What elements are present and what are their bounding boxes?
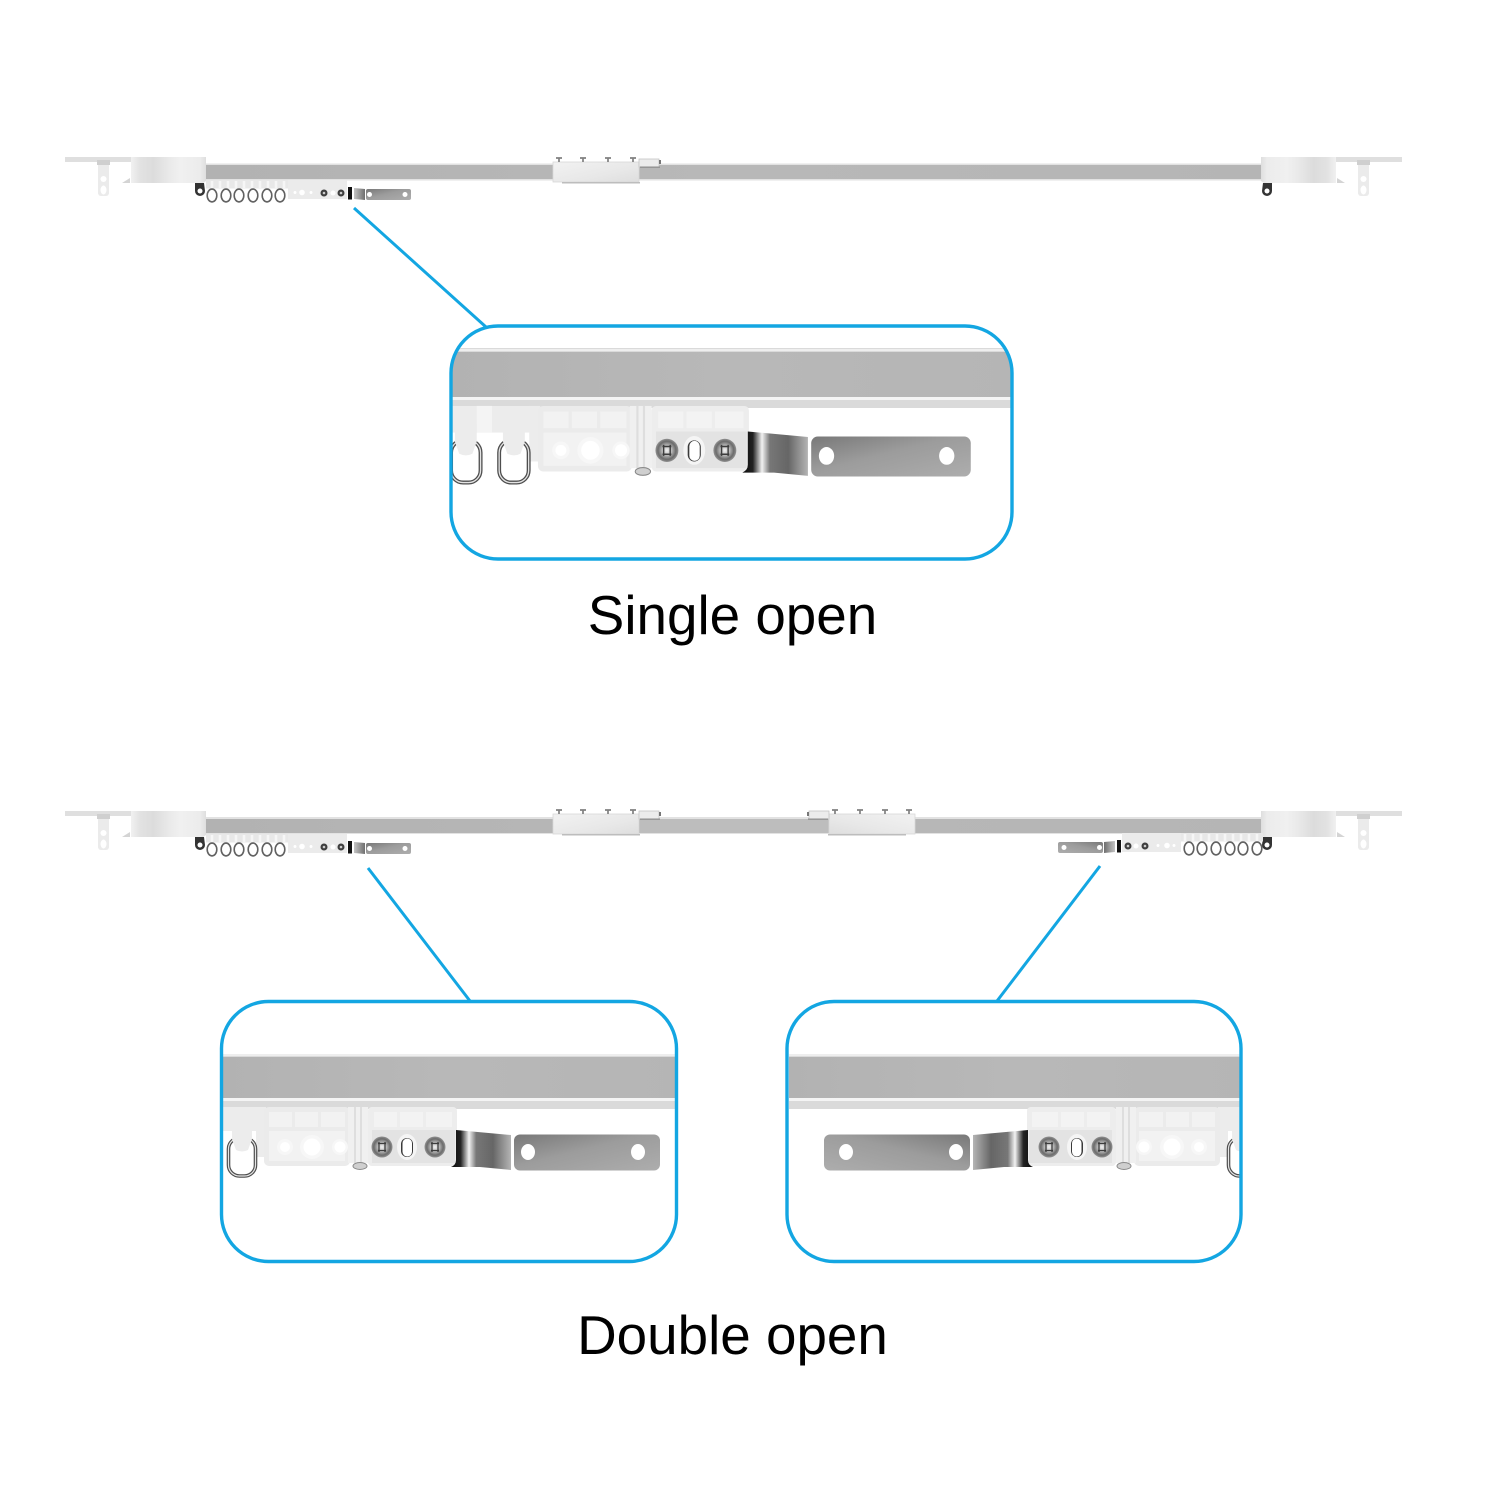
panel: double open right detail xyxy=(785,1000,1243,1264)
centre connector right xyxy=(807,810,915,836)
panel border xyxy=(451,326,1012,559)
track body xyxy=(205,164,1265,180)
magnified rail xyxy=(789,1054,1240,1178)
connector line to left double open detail xyxy=(368,868,470,1001)
end bracket left xyxy=(65,811,206,850)
panel border xyxy=(222,1002,676,1262)
label: Single open: Single open xyxy=(588,584,877,646)
label: Double open: Double open xyxy=(577,1304,888,1366)
panel: double open left detail xyxy=(220,1000,678,1264)
end bracket left xyxy=(65,157,206,196)
magnified rail xyxy=(223,1054,675,1178)
panel border xyxy=(787,1002,1241,1262)
rail: double open track xyxy=(65,810,1402,856)
curtain runner right xyxy=(1058,833,1263,855)
connector line to single open detail xyxy=(354,208,486,327)
connector line to right double open detail xyxy=(997,866,1100,1001)
track body xyxy=(205,817,1265,834)
end bracket right xyxy=(1261,157,1402,196)
rail: single open track xyxy=(65,157,1402,202)
curtain runner and master carrier xyxy=(206,180,411,202)
end bracket right xyxy=(1261,811,1402,850)
curtain runner left xyxy=(206,834,411,856)
panel: single open detail xyxy=(413,326,1020,559)
centre connector xyxy=(553,158,661,184)
magnified rail xyxy=(413,348,1020,483)
centre connector left xyxy=(553,810,661,836)
